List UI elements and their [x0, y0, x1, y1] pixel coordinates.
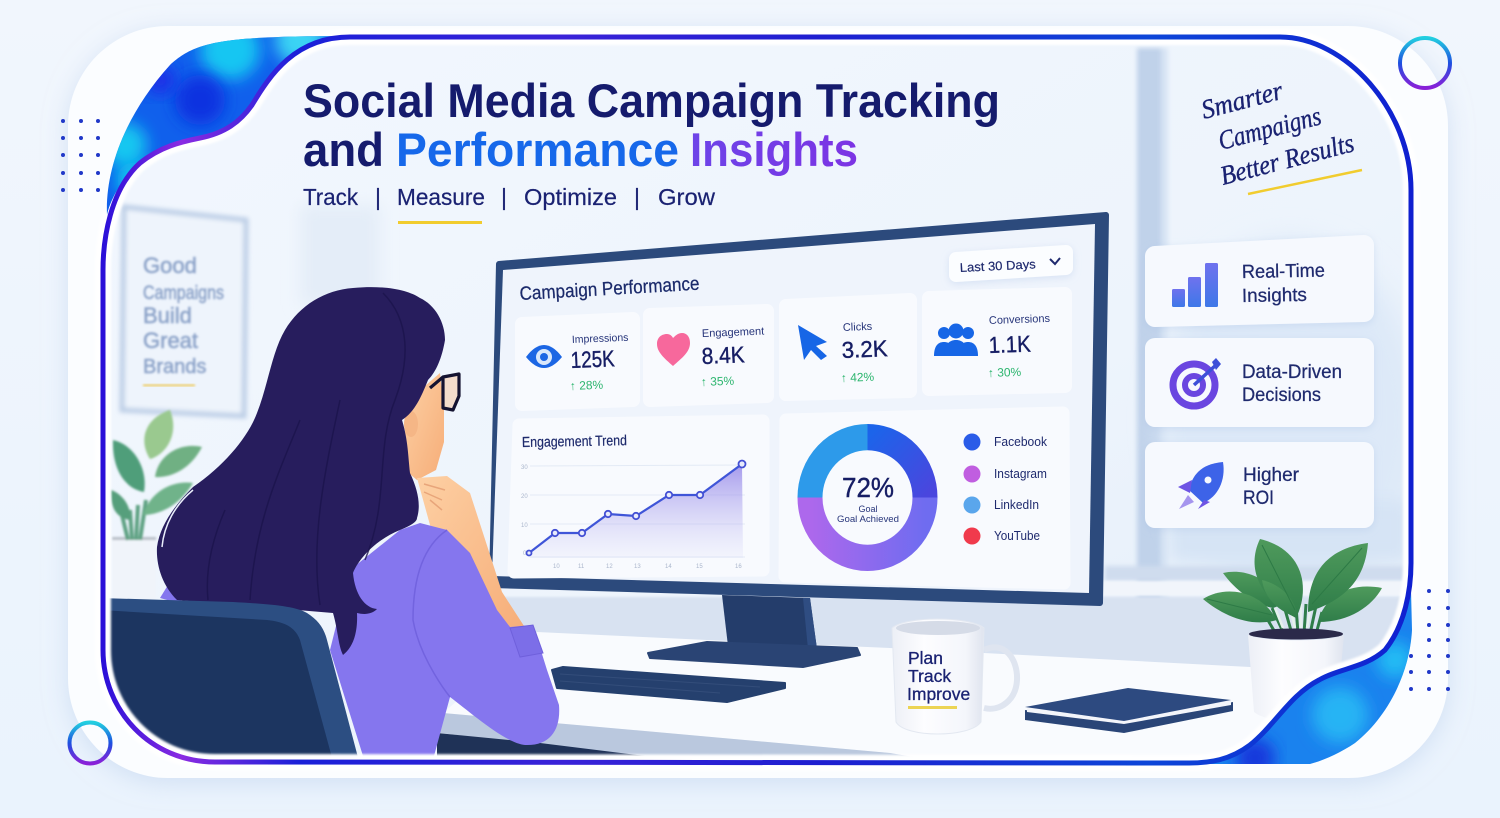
dot grid: right: [1409, 589, 1450, 691]
KPI card: conversions: ↑ 30%: [988, 365, 1022, 380]
monitor stand: [648, 595, 860, 667]
subtitle: Grow: [658, 184, 715, 210]
KPI card: engagement: 8.4K: [701, 341, 746, 369]
title: Insights: [690, 123, 858, 176]
KPI card: engagement: ↑ 35%: [701, 374, 735, 389]
monitor: [492, 215, 1106, 603]
KPI card: clicks: ↑ 42%: [841, 370, 875, 385]
donut label: [838, 478, 898, 522]
office chair: [100, 598, 360, 765]
benefit card: data-driven decisions: [1155, 348, 1364, 417]
panel: engagement trend chart: 20: [521, 494, 528, 500]
icon: rocket: [1178, 462, 1224, 509]
benefit card: real-time insights: [1155, 245, 1364, 317]
panel: goal donut and legend: [785, 413, 1064, 583]
person: skin, arm and hand: [404, 373, 524, 635]
panel: engagement trend chart: 12: [606, 564, 613, 570]
subtitle: Track: [303, 184, 358, 210]
KPI card: impressions: [522, 319, 633, 404]
legend: [964, 434, 1048, 544]
subtitle: [303, 184, 715, 210]
feathered white inner edge: [103, 37, 1411, 763]
blurred wall poster: Brands: [143, 356, 206, 378]
handwritten note: Campaigns: [1215, 100, 1324, 156]
handwritten note: Better Results: [1217, 127, 1357, 191]
coffee mug: [892, 619, 1017, 734]
title: Performance: [396, 123, 679, 176]
decorative blue blob: bottom right: [1210, 592, 1412, 764]
legend: Instagram: [994, 467, 1047, 481]
donut label: 72%: [842, 472, 894, 503]
person: long dark hair: [157, 287, 445, 655]
blurred background plant: [110, 409, 203, 542]
subtitle underline: [398, 221, 482, 224]
date range pill: Last 30 Days: [959, 257, 1036, 275]
potted plant: [1203, 539, 1382, 721]
icon: people: [934, 324, 978, 356]
dot grid: left: [61, 119, 100, 192]
mug text: [907, 648, 970, 704]
handwritten note: Smarter: [1198, 75, 1286, 125]
panel: engagement trend chart: 13: [634, 564, 641, 570]
decorative ring: bottom left: [70, 722, 110, 764]
title: [303, 74, 1000, 176]
donut chart: [810, 437, 925, 558]
KPI card: clicks: Clicks: [843, 321, 873, 334]
blurred wall poster: Good: [143, 253, 197, 278]
benefit card: real-time insights: Insights: [1242, 285, 1307, 307]
KPI card: conversions: [929, 294, 1065, 389]
subtitle: |: [375, 184, 381, 210]
panel: engagement trend chart: 0: [523, 551, 527, 557]
mug text: Improve: [907, 684, 970, 704]
panel: engagement trend chart: 10: [521, 523, 528, 529]
panel: engagement trend chart: 15: [696, 564, 703, 570]
benefit card: real-time insights: Real-Time: [1242, 261, 1325, 283]
icon: target: [1173, 358, 1221, 406]
subtitle: Measure: [397, 184, 485, 210]
panel: engagement trend chart: 10: [553, 564, 560, 570]
legend: YouTube: [994, 529, 1040, 543]
subtitle: Optimize: [524, 184, 617, 210]
mug text: Plan: [908, 648, 943, 668]
panel: engagement trend chart: 30: [521, 465, 528, 471]
benefit card: data-driven decisions: Data-Driven: [1242, 362, 1342, 383]
desk surface: [446, 632, 1266, 756]
blurred wall poster: Build: [143, 303, 192, 328]
blurred wall poster: Campaigns: [143, 282, 224, 304]
keyboard: [552, 667, 785, 702]
panel: engagement trend chart: 11: [578, 564, 585, 570]
subtitle: |: [634, 184, 640, 210]
blurred wall poster: [122, 207, 246, 416]
benefit card: higher ROI: [1155, 452, 1364, 518]
panel: engagement trend chart: 14: [665, 564, 672, 570]
KPI card: conversions: Conversions: [989, 313, 1051, 327]
icon: cursor: [798, 325, 827, 360]
icon: bars: [1172, 263, 1218, 307]
chart heading: Engagement Trend: [522, 433, 627, 451]
KPI card: impressions: 125K: [570, 345, 616, 373]
handwritten note: [1198, 75, 1357, 191]
title: Social Media Campaign Tracking: [303, 74, 1000, 127]
KPI card: engagement: [650, 311, 767, 400]
icon: eye: [526, 345, 562, 368]
blurred window bar: [1137, 48, 1168, 608]
date range pill: [956, 252, 1066, 275]
mug text: Track: [908, 666, 951, 686]
KPI card: engagement: Engagement: [702, 326, 764, 340]
icon: heart: [657, 333, 690, 366]
panel: engagement trend chart: [514, 421, 763, 572]
gradient frame line: [103, 37, 1411, 763]
benefit card: higher ROI: Higher: [1243, 465, 1300, 486]
title: and: [303, 123, 384, 176]
dashboard heading: Campaign Performance: [519, 274, 700, 305]
notebook: [1025, 688, 1233, 733]
decorative ring: top right: [1400, 38, 1450, 88]
illustrated office scene: [100, 35, 1420, 765]
KPI card: conversions: 1.1K: [988, 331, 1032, 358]
person: glasses: [430, 374, 459, 410]
KPI card: impressions: ↑ 28%: [570, 378, 604, 393]
note underline: [1248, 170, 1362, 194]
KPI card: clicks: 3.2K: [841, 335, 889, 363]
donut label: Goal: [858, 504, 878, 514]
panel: engagement trend chart: 16: [735, 564, 742, 570]
subtitle: |: [501, 184, 507, 210]
benefit card: data-driven decisions: Decisions: [1242, 385, 1321, 406]
decorative blue blob: top left: [106, 36, 332, 215]
benefit card: higher ROI: ROI: [1243, 488, 1274, 509]
legend: Facebook: [994, 435, 1048, 449]
legend: LinkedIn: [994, 498, 1039, 512]
KPI card: impressions: Impressions: [572, 332, 629, 346]
KPI card: clicks: [786, 300, 910, 394]
donut label: Goal Achieved: [837, 514, 899, 525]
blurred wall poster: Great: [143, 328, 198, 353]
person: sweater: [160, 523, 559, 756]
